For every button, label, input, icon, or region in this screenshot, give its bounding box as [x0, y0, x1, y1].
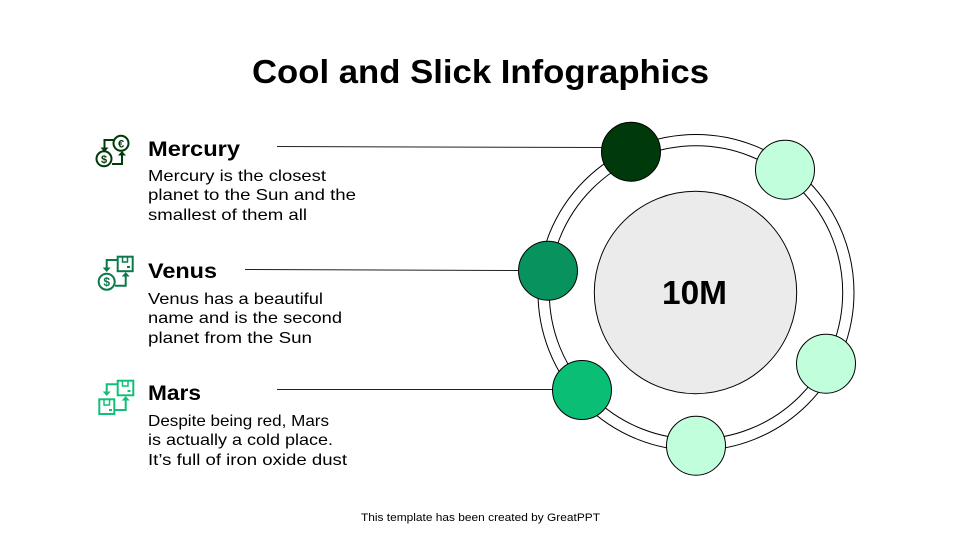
- text: Mercury description: Mercury is the closest: [148, 168, 327, 185]
- node: lower right: [796, 334, 856, 393]
- center value: 10M: [662, 274, 727, 311]
- text: Venus description: name and is the second: [148, 310, 342, 327]
- heading: Mars: Mars: [148, 382, 201, 405]
- text: Mercury description: [148, 168, 356, 224]
- footer credit: This template has been created by GreatPPT: [361, 512, 600, 524]
- node: Venus: [518, 241, 578, 300]
- heading: Venus: Venus: [148, 260, 217, 283]
- text: Mercury description: smallest of them all: [148, 207, 307, 224]
- node: bottom: [666, 416, 726, 475]
- text: Mars description: is actually a cold place.: [148, 432, 333, 449]
- text: Venus description: [148, 291, 342, 347]
- connector lines: [245, 146, 603, 390]
- icon: box exchange: [99, 381, 133, 414]
- icon: currency exchange: [96, 136, 128, 166]
- text: Mars description: [148, 413, 348, 469]
- center circle: [594, 191, 797, 394]
- heading: Mercury: Mercury: [148, 138, 240, 161]
- icon: box to money exchange: $: [103, 275, 110, 289]
- node: Mars: [552, 360, 612, 420]
- text: Venus description: planet from the Sun: [148, 330, 312, 347]
- icon: currency exchange: €: [118, 138, 124, 150]
- node: top right: [756, 140, 814, 199]
- text: Mars description: It’s full of iron oxide dust: [148, 452, 348, 469]
- text: Mercury description: planet to the Sun and the: [148, 187, 356, 204]
- icon: box to money exchange: [99, 257, 133, 290]
- icon: currency exchange: $: [101, 154, 107, 166]
- text: Mars description: Despite being red, Mars: [148, 413, 329, 430]
- text: Venus description: Venus has a beautiful: [148, 291, 323, 308]
- title: Cool and Slick Infographics: [252, 53, 709, 90]
- node: Mercury: [602, 122, 660, 181]
- diagram: orbit rings: [538, 134, 854, 450]
